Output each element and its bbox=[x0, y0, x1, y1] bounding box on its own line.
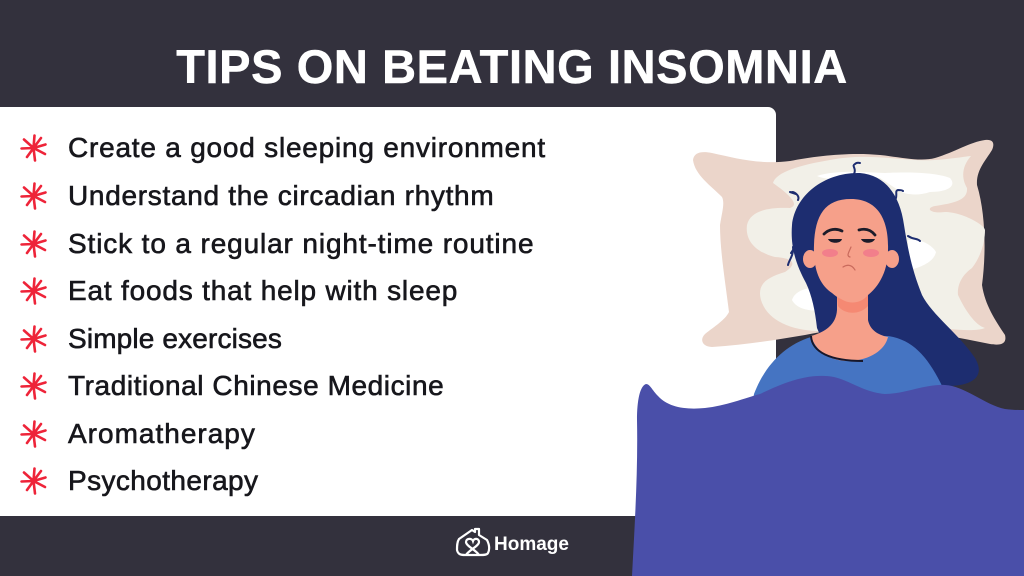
tip 4: Eat foods that help with sleep bbox=[68, 275, 458, 306]
neckline bbox=[811, 336, 863, 361]
nose and mouth bbox=[843, 247, 855, 270]
tip 5: Simple exercises bbox=[68, 323, 282, 354]
eyes and brows bbox=[824, 229, 875, 235]
icon: house with heart bbox=[456, 528, 490, 556]
tip 2: Understand the circadian rhythm bbox=[68, 180, 494, 211]
blanket bbox=[632, 376, 1024, 576]
logo: Homage: Homage bbox=[494, 534, 569, 555]
panel: tips list bbox=[0, 107, 776, 516]
face and neck bbox=[803, 199, 899, 361]
tip 3: Stick to a regular night-time routine bbox=[68, 228, 534, 259]
sweater bbox=[750, 336, 945, 420]
tip 1: Create a good sleeping environment bbox=[68, 132, 546, 163]
tip 6: Traditional Chinese Medicine bbox=[68, 370, 444, 401]
tip 8: Psychotherapy bbox=[68, 465, 258, 496]
cheeks bbox=[822, 249, 838, 257]
logo: Homage bbox=[456, 528, 569, 556]
tip 7: Aromatherapy bbox=[68, 418, 256, 449]
title: TIPS ON BEATING INSOMNIA bbox=[176, 40, 848, 93]
long hair bbox=[788, 163, 979, 390]
pillow bbox=[693, 140, 1005, 347]
